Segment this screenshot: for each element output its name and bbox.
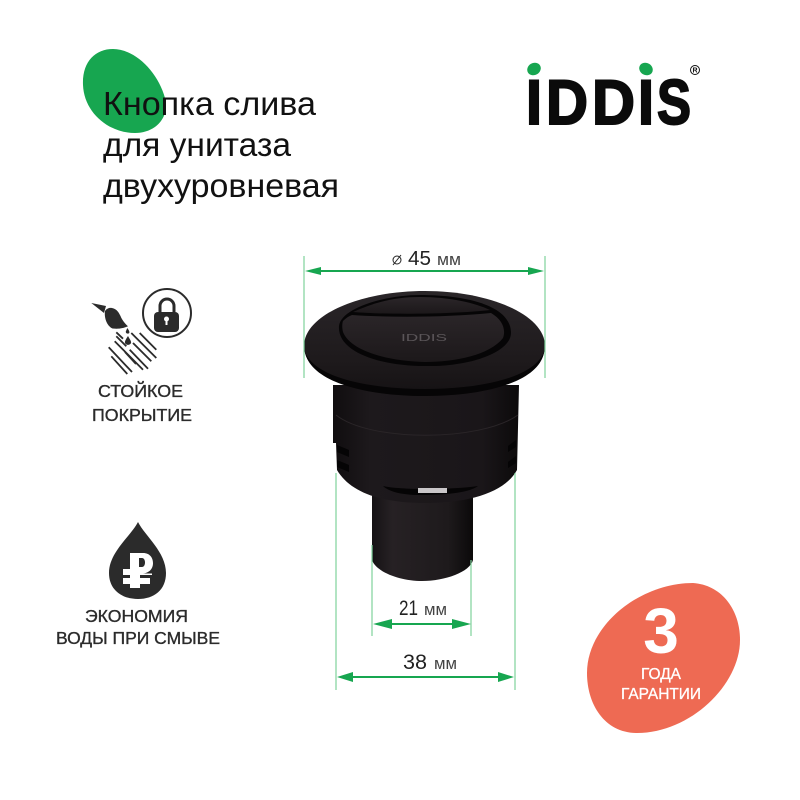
title: Кнопка слива	[103, 85, 317, 122]
logo: D	[592, 68, 635, 138]
dimension: 38 mm: мм	[434, 654, 457, 673]
title: для унитаза	[103, 126, 292, 163]
logo: R	[692, 68, 698, 74]
warranty badge: ГАРАНТИИ	[621, 686, 701, 703]
title	[103, 85, 339, 204]
label: durable coating: СТОЙКОЕ	[98, 380, 183, 401]
dimension: 38 mm: 38	[403, 651, 427, 674]
warranty badge	[587, 583, 740, 733]
label: water saving	[56, 606, 220, 648]
dimension: 45 mm: 45	[408, 248, 431, 270]
product: flush button	[304, 291, 545, 581]
dimension: 45 mm: мм	[437, 250, 461, 269]
logo: S	[657, 68, 691, 138]
warranty badge: ГОДА	[641, 666, 682, 683]
label: durable coating	[92, 380, 192, 425]
title: двухуровневая	[103, 167, 339, 204]
logo	[525, 60, 700, 138]
dimension: 38 mm	[336, 473, 515, 690]
product: flush button: IDDIS	[401, 333, 448, 344]
warranty badge: 3	[643, 595, 679, 667]
green blob	[83, 49, 166, 133]
label: water saving: ЭКОНОМИЯ	[85, 606, 188, 626]
dimension: 21 mm: мм	[424, 600, 447, 619]
dimension: 21 mm: 21	[399, 597, 418, 620]
icon: drop with ruble	[109, 522, 166, 599]
logo: I	[638, 68, 654, 138]
icon: brush and lock	[91, 289, 191, 374]
dimension: 21 mm	[372, 545, 471, 636]
label: water saving: ВОДЫ ПРИ СМЫВЕ	[56, 628, 220, 648]
label: durable coating: ПОКРЫТИЕ	[92, 405, 192, 425]
logo: I	[526, 68, 542, 138]
logo: D	[546, 68, 588, 138]
dimension: 45 mm	[304, 248, 545, 378]
